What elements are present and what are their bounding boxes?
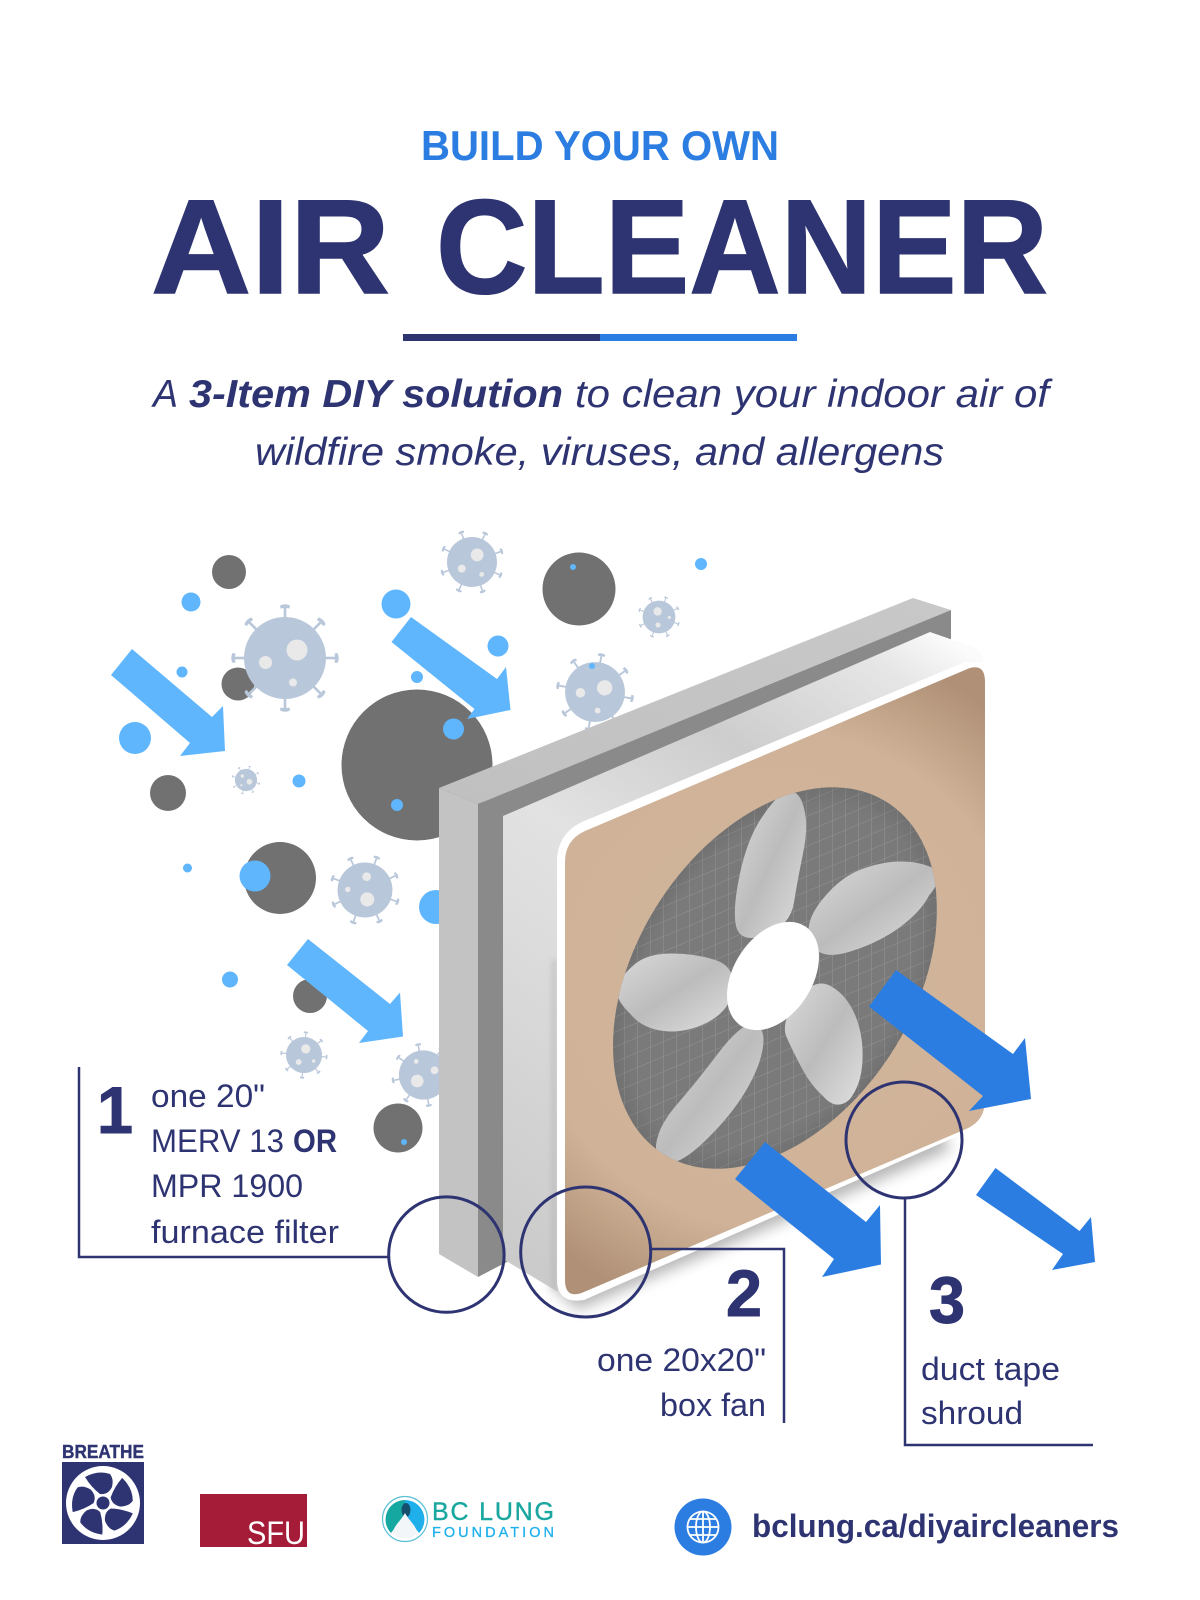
subtitle: A xyxy=(151,373,178,416)
shadow xyxy=(550,1125,950,1310)
title divider xyxy=(403,334,797,341)
heading: build your own: BUILD YOUR OWN xyxy=(421,122,779,169)
callout 2: box fan: one 20x20" xyxy=(597,1342,766,1378)
logo: BREATHE: BREATHE xyxy=(62,1442,144,1462)
arrow: air in, lower xyxy=(287,939,403,1043)
arrow: air in, top centre xyxy=(392,617,510,719)
callout 2: box fan: 2 xyxy=(726,1256,762,1330)
arrow: air in, top left xyxy=(111,649,225,756)
website url: bclung.ca/diyaircleaners xyxy=(752,1508,1119,1544)
logo: BREATHE xyxy=(62,1442,144,1544)
subtitle: wildfire smoke, viruses, and allergens xyxy=(255,431,944,474)
logo: BC Lung Foundation: FOUNDATION xyxy=(432,1525,554,1541)
subtitle xyxy=(151,373,1053,474)
callout 1: furnace filter: OR xyxy=(293,1123,337,1159)
title: air cleaner: CLEANER xyxy=(436,173,1048,322)
arrow: clean air out, right xyxy=(976,1168,1095,1270)
callout 1: furnace filter: 1 xyxy=(97,1073,133,1147)
icon: globe xyxy=(674,1498,732,1556)
allergen on arrow xyxy=(443,718,464,740)
callout 2: box fan: box fan xyxy=(660,1387,766,1423)
furnace filter xyxy=(439,598,951,1277)
particles: smoke, viruses and allergens xyxy=(119,520,707,1152)
callout 3: duct tape shroud xyxy=(846,1082,1093,1445)
fan hub xyxy=(727,906,819,1046)
fan opening with mesh xyxy=(613,787,937,1169)
fan blades xyxy=(619,794,935,1160)
logo: SFU: SFU xyxy=(247,1515,305,1551)
logo: BC Lung Foundation: BC LUNG xyxy=(432,1498,554,1526)
logo: BC Lung Foundation xyxy=(382,1496,554,1542)
subtitle: to clean your indoor air of xyxy=(575,373,1053,416)
allergen particles xyxy=(119,558,707,1145)
callout 2: box fan xyxy=(521,1187,784,1423)
fan body xyxy=(503,632,1000,1310)
title: air cleaner xyxy=(151,173,1048,322)
smoke particles xyxy=(150,552,616,1152)
callout 3: duct tape shroud: duct tape xyxy=(921,1351,1060,1387)
callout 3: duct tape shroud: shroud xyxy=(921,1395,1023,1431)
callout 3: duct tape shroud: 3 xyxy=(929,1263,965,1337)
cardboard front xyxy=(565,667,985,1294)
callout 1: furnace filter: furnace filter xyxy=(151,1214,339,1250)
arrow: clean air out, upper xyxy=(869,970,1031,1111)
callout 1: furnace filter xyxy=(79,1067,504,1312)
viruses xyxy=(226,520,687,1112)
callout 1: furnace filter: MERV 13 xyxy=(151,1123,284,1159)
title: air cleaner: AIR xyxy=(151,173,390,322)
callout 1: furnace filter: MPR 1900 xyxy=(151,1168,303,1204)
logo: SFU xyxy=(200,1494,307,1551)
white rim xyxy=(557,662,1000,1301)
subtitle: 3-Item DIY solution xyxy=(189,373,563,416)
arrow: clean air out, lower xyxy=(735,1142,881,1277)
callout 1: furnace filter: one 20" xyxy=(151,1078,265,1114)
